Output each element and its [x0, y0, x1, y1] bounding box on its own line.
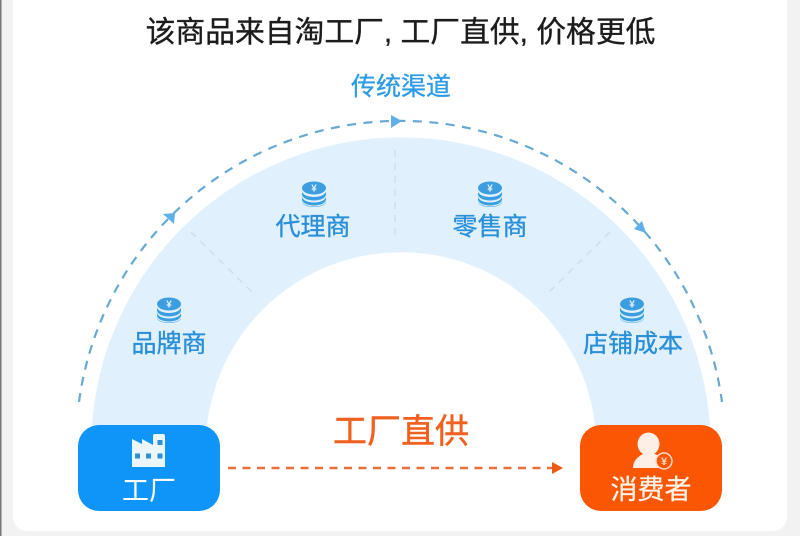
- node: factory: [78, 425, 220, 511]
- segment: retailer: 零售商: [452, 213, 528, 241]
- segment: store cost: [583, 298, 683, 358]
- segment: brand owner: 品牌商: [131, 330, 207, 358]
- segment: brand owner: [131, 298, 207, 358]
- icon: coin stack: ¥: [166, 300, 172, 310]
- chart: half ring of traditional channel costs: [79, 115, 722, 425]
- icon: coin stack: ¥: [487, 184, 493, 194]
- heading: factory direct: 工厂直供: [333, 413, 469, 451]
- icon: person with yuan badge: [633, 432, 672, 469]
- icon: person with yuan badge: ¥: [661, 456, 668, 468]
- icon: coin stack: ¥: [311, 184, 317, 194]
- arrow: factory to consumer: [228, 462, 563, 474]
- half ring band: [92, 137, 710, 425]
- node: consumer: 消费者: [610, 475, 692, 505]
- node: factory: 工厂: [122, 476, 176, 506]
- segment: agent: 代理商: [275, 213, 351, 241]
- icon: coin stack: ¥: [629, 300, 635, 310]
- title: 该商品来自淘工厂, 工厂直供, 价格更低: [146, 16, 655, 49]
- icon: factory: [132, 434, 165, 467]
- segment: agent: [275, 182, 351, 241]
- segment: retailer: [452, 182, 528, 241]
- segment: store cost: 店铺成本: [583, 330, 683, 358]
- dashed arc with arrows: [79, 115, 722, 402]
- heading: traditional channel: 传统渠道: [351, 73, 451, 101]
- node: consumer: [580, 425, 722, 511]
